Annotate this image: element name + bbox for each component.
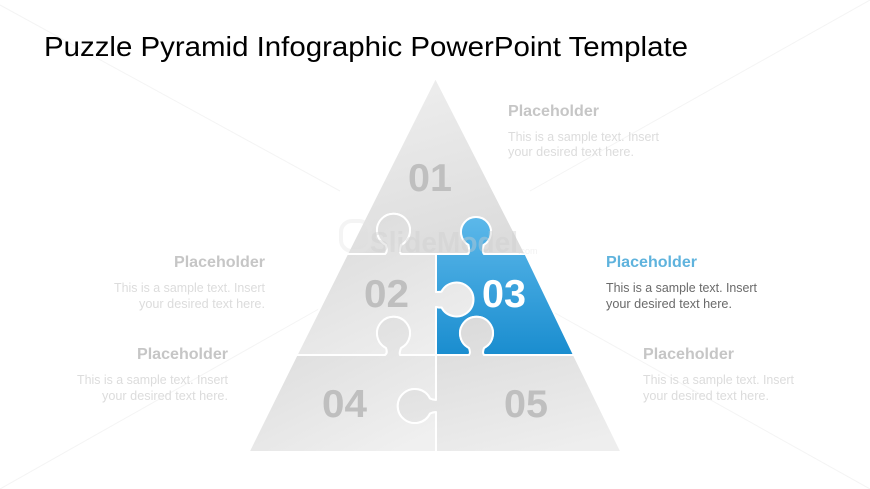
- text block 05: Placeholder: [643, 346, 734, 363]
- piece 04: 04: [322, 383, 367, 426]
- text block 04: [77, 346, 228, 403]
- text block 05: your desired text here.: [643, 388, 769, 403]
- piece 03 highlighted: [436, 217, 574, 355]
- text block 05: [643, 346, 794, 403]
- text block 03 highlighted: This is a sample text. Insert: [606, 280, 757, 295]
- text block 01: [508, 103, 659, 159]
- piece 02: [296, 214, 474, 355]
- puzzle pyramid: [248, 78, 622, 452]
- text block 02: This is a sample text. Insert: [114, 280, 265, 295]
- piece 01: 01: [408, 157, 452, 200]
- text block 04: Placeholder: [137, 346, 228, 363]
- text block 02: [114, 254, 265, 311]
- text block 03 highlighted: [606, 254, 757, 311]
- text block 02: Placeholder: [174, 254, 265, 271]
- text block 04: your desired text here.: [102, 388, 228, 403]
- text block 04: This is a sample text. Insert: [77, 372, 228, 387]
- watermark: SlideModel: [370, 227, 518, 259]
- piece 05: 05: [504, 383, 548, 426]
- title: Puzzle Pyramid Infographic PowerPoint Template: [44, 31, 688, 62]
- piece 02: 02: [364, 273, 409, 316]
- text block 01: This is a sample text. Insert: [508, 129, 659, 144]
- piece 03 highlighted: 03: [482, 273, 526, 316]
- text block 01: your desired text here.: [508, 144, 634, 159]
- text block 03 highlighted: Placeholder: [606, 254, 697, 271]
- text block 03 highlighted: your desired text here.: [606, 296, 732, 311]
- text block 02: your desired text here.: [139, 296, 265, 311]
- piece 05: [398, 317, 622, 452]
- text block 05: This is a sample text. Insert: [643, 372, 794, 387]
- watermark: [341, 221, 538, 259]
- watermark: .com: [518, 246, 538, 256]
- piece 01: [347, 78, 526, 254]
- text block 01: Placeholder: [508, 103, 599, 120]
- piece 04: [248, 317, 436, 452]
